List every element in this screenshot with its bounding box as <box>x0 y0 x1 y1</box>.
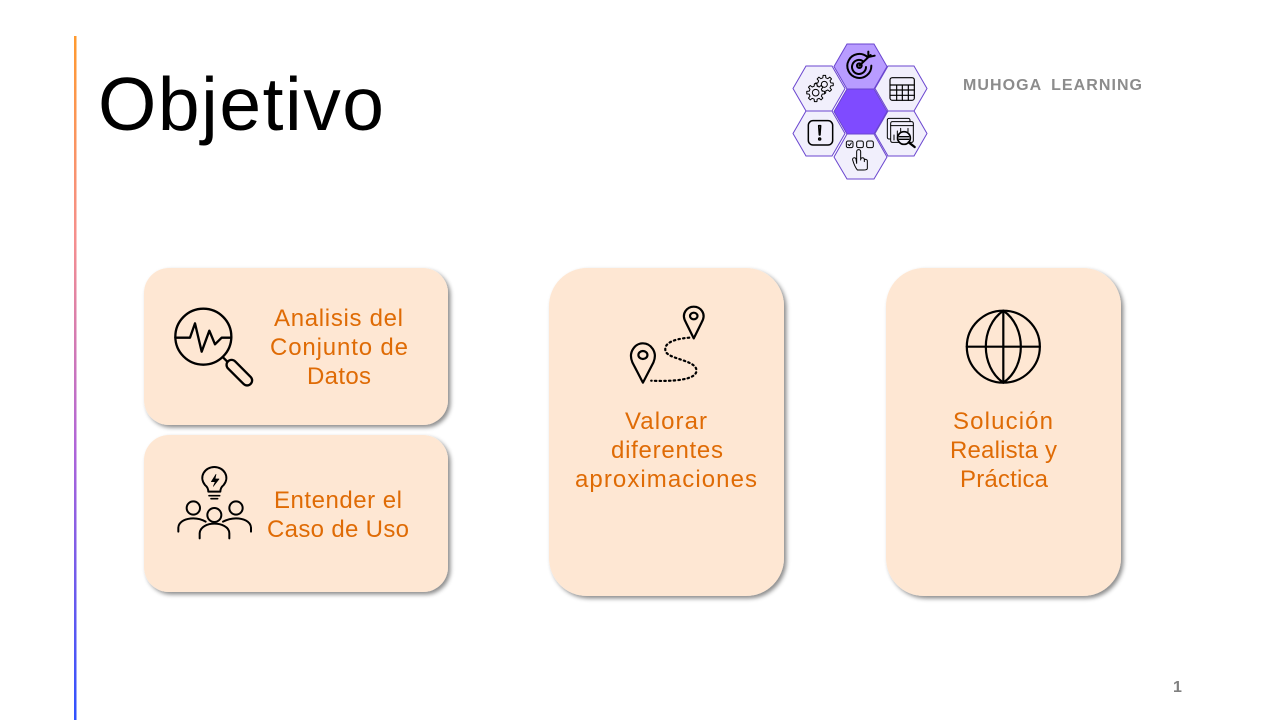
label: aproximaciones <box>575 466 757 493</box>
brand name: MUHOGA LEARNING <box>963 77 1142 94</box>
page number: 1 <box>1173 679 1182 696</box>
icon: route between map pins <box>631 307 704 383</box>
icon: globe <box>967 311 1040 383</box>
icon: alert <box>808 121 833 145</box>
label <box>575 408 757 493</box>
icon: magnifier with pulse <box>175 309 254 388</box>
icon: table <box>890 78 914 100</box>
label <box>950 408 1057 493</box>
label <box>270 305 408 390</box>
panel: analisis del conjunto de datos <box>144 268 448 425</box>
panel: entender el caso de uso <box>144 435 448 592</box>
label: diferentes <box>611 437 723 464</box>
panel: solucion realista y practica <box>886 268 1121 596</box>
label: Entender el <box>274 487 402 514</box>
label: Realista y <box>950 437 1057 464</box>
icon: hand selecting options <box>846 141 873 170</box>
label: Datos <box>307 363 371 390</box>
label: Solución <box>953 408 1053 435</box>
title: Objetivo <box>98 62 384 146</box>
label: Práctica <box>960 466 1049 493</box>
gradient vertical accent line <box>74 36 76 720</box>
icon: chart window with magnifier <box>887 118 915 147</box>
logo: hexagon cluster <box>793 44 927 179</box>
icon: gears <box>807 75 833 102</box>
label: Valorar <box>625 408 707 435</box>
panel: valorar diferentes aproximaciones <box>549 268 784 596</box>
label: Caso de Uso <box>267 516 409 543</box>
icon: team with lightbulb <box>178 467 251 538</box>
label: Analisis del <box>274 305 403 332</box>
label: Conjunto de <box>270 334 408 361</box>
icon: target <box>847 52 875 78</box>
label <box>267 487 409 543</box>
